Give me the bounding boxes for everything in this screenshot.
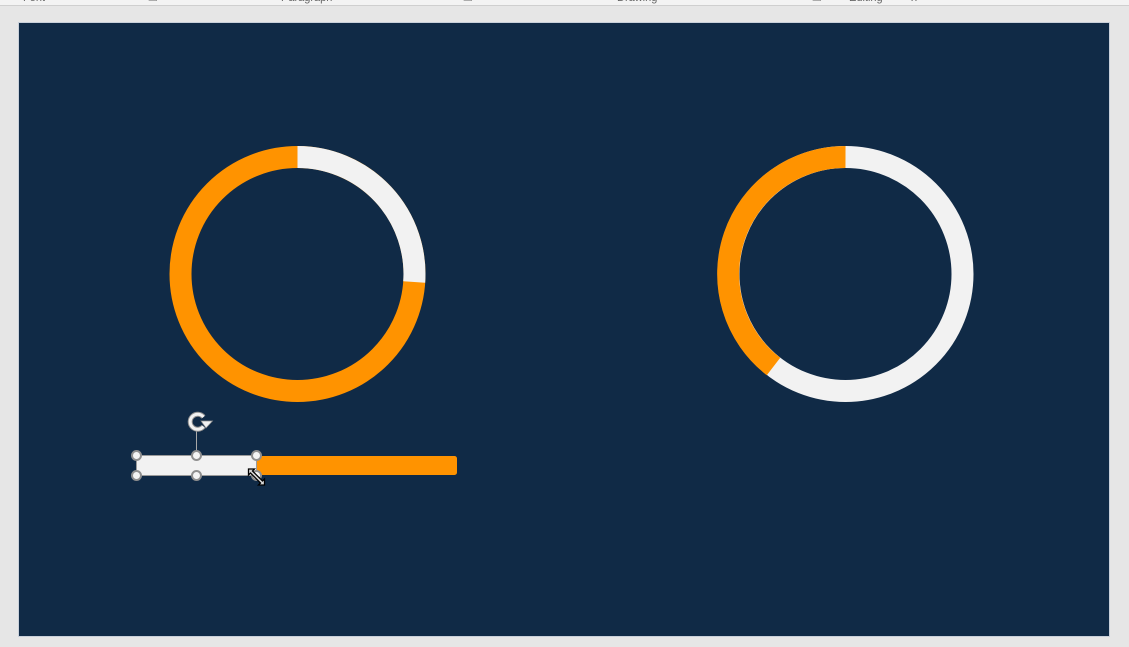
icon: rotate handle [190,414,212,429]
icon: resize cursor [248,469,264,485]
selection handles [132,431,261,480]
donut chart left [180,157,414,391]
donut chart right [728,157,962,391]
toolbar ribbon strip [0,0,1129,6]
progress bar [136,456,457,476]
